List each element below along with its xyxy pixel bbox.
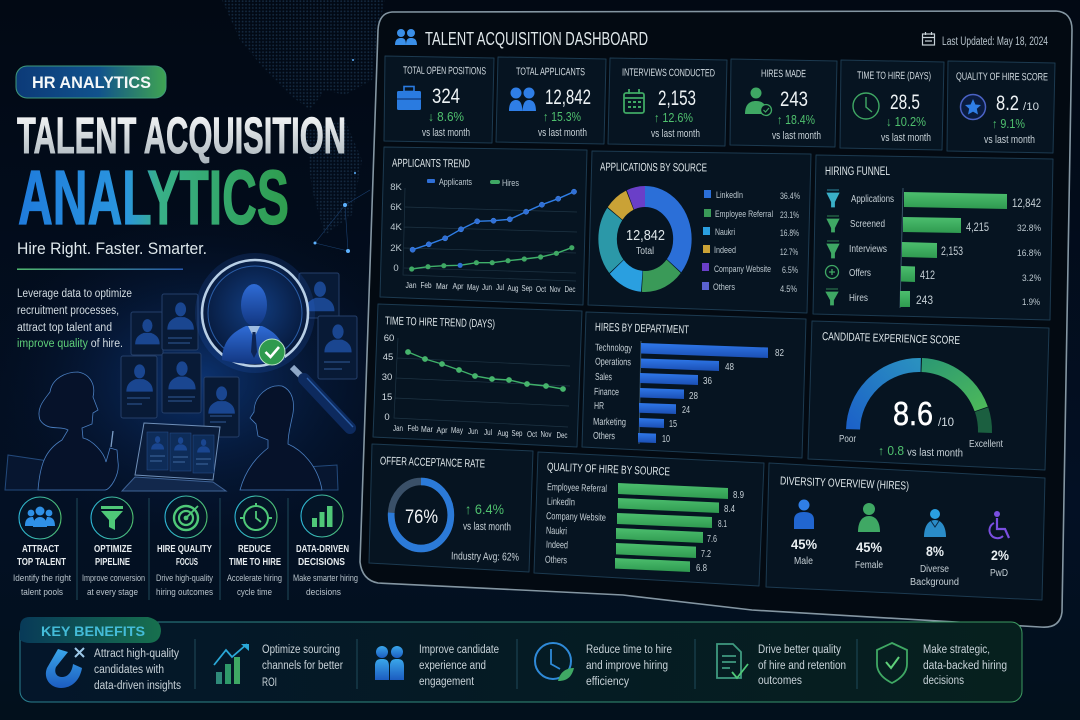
pillar: hire quality focus: FOCUS <box>176 556 198 568</box>
panel: applications by source: 12,842 <box>626 227 665 244</box>
panel: hires by department: HIRES BY DEPARTMENT <box>595 322 689 336</box>
KPI card: total open positions: vs last month <box>422 127 470 139</box>
benefit: time to hire: efficiency <box>586 676 629 688</box>
illustration: recruiter woman <box>5 372 118 490</box>
line: hires <box>409 245 574 272</box>
panel: offer acceptance rate: ↑ 6.4% <box>465 501 504 517</box>
KPI card: hires made: ↑ 18.4% <box>777 113 815 127</box>
panel: hiring funnel <box>813 155 1053 320</box>
x axis labels: Jan <box>406 281 416 290</box>
KPI card: interviews conducted: vs last month <box>651 128 700 140</box>
labels: 15 <box>669 419 677 430</box>
icon: calendar <box>922 32 934 45</box>
bars <box>615 483 728 572</box>
panel: candidate experience score: vs last month <box>907 447 963 459</box>
pillar: hire quality focus: hiring outcomes <box>156 587 213 598</box>
pillar: attract top talent <box>13 497 71 598</box>
bars <box>638 343 768 443</box>
stat: diverse background: 8% <box>926 543 944 559</box>
hero: badge: HR ANALYTICS <box>32 74 151 92</box>
pillar: attract top talent: talent pools <box>21 587 63 598</box>
KPI card: hires made <box>730 59 837 147</box>
x axis labels: Sep <box>512 429 523 438</box>
x axis labels: Dec <box>556 431 568 440</box>
y axis labels <box>382 333 394 423</box>
y axis labels: 8K <box>390 182 402 193</box>
y axis labels: 45 <box>383 352 393 363</box>
labels: Finance <box>594 387 619 398</box>
illustration: laptop <box>122 423 226 491</box>
labels: 28 <box>689 391 698 402</box>
legend: Others <box>713 282 735 293</box>
benefit: time to hire <box>535 643 672 688</box>
stat: pwd: PwD <box>990 568 1008 579</box>
y axis labels: 15 <box>382 392 392 403</box>
panel: time to hire trend: TIME TO HIRE TREND (DAYS) <box>385 315 495 331</box>
labels: Others <box>593 431 615 442</box>
KPI card: interviews conducted: 2,153 <box>658 87 696 110</box>
icon: clock <box>535 643 574 681</box>
legend: 23.1% <box>780 210 799 221</box>
pillar: reduce time to hire <box>227 496 282 598</box>
benefit: time to hire: and improve hiring <box>586 660 668 672</box>
benefit: candidate experience <box>375 644 499 688</box>
icon: star <box>960 94 986 120</box>
benefit: quality of hire: of hire and retention <box>758 660 846 672</box>
hero: description: Leverage data to optimize <box>17 288 132 300</box>
labels <box>593 343 784 445</box>
legend <box>702 190 800 295</box>
pillar: hire quality focus: HIRE QUALITY <box>157 543 212 555</box>
labels: Employee Referral <box>547 482 607 495</box>
labels: 8.1 <box>718 519 727 530</box>
pillar: optimize pipeline: PIPELINE <box>95 556 130 568</box>
KPI card: hires made: vs last month <box>772 130 821 142</box>
KPI card: quality of hire score: vs last month <box>984 134 1035 146</box>
panel: offer acceptance rate: OFFER ACCEPTANCE RATE <box>380 455 485 471</box>
hero: main title: TALENT ACQUISITION <box>17 107 346 164</box>
tab <box>20 617 161 643</box>
ring chart <box>391 482 451 548</box>
panel: applicants trend: APPLICANTS TREND <box>392 158 470 170</box>
benefit: strategic decisions <box>877 643 1007 687</box>
row: hires: 243 <box>916 295 933 307</box>
gauge <box>853 363 987 433</box>
hero: badge <box>16 66 166 98</box>
KPI card: hires made: HIRES MADE <box>761 68 806 80</box>
pillar: hire quality focus: Drive high-quality <box>156 573 213 584</box>
labels: Company Website <box>546 511 606 524</box>
y axis labels: 4K <box>390 222 402 233</box>
benefit: quality of hire: Drive better quality <box>758 644 841 656</box>
row: offers: 3.2% <box>1022 273 1041 284</box>
stat: male: 45% <box>791 536 818 552</box>
labels: Others <box>545 555 567 566</box>
key benefits bar <box>20 617 1022 702</box>
illustration: candidate cards <box>121 273 357 437</box>
y axis labels: 2K <box>390 243 402 254</box>
labels: 36 <box>703 376 712 387</box>
icon: clock <box>853 93 879 119</box>
x axis labels: Dec <box>564 285 576 294</box>
row: screened: 32.8% <box>1017 223 1041 234</box>
pillar: data-driven decisions <box>293 495 358 598</box>
x axis labels: Apr <box>436 426 448 435</box>
KPI card: total applicants <box>496 57 606 144</box>
x axis labels: Sep <box>522 284 533 293</box>
row: offers: Offers <box>849 268 871 279</box>
donut chart <box>608 196 682 282</box>
KPI card: total applicants: 12,842 <box>545 86 591 109</box>
icon: people <box>395 29 417 45</box>
icon: people <box>19 497 61 539</box>
KPI card: total applicants: ↑ 15.3% <box>543 110 581 124</box>
panel: candidate experience score: 8.6 <box>893 395 933 432</box>
KPI card: time to hire: 28.5 <box>890 91 920 114</box>
benefit: strategic decisions: decisions <box>923 675 964 687</box>
benefit: strategic decisions: Make strategic, <box>923 644 990 656</box>
labels: 7.2 <box>701 549 711 560</box>
x axis labels: Jul <box>484 428 492 437</box>
x axis labels: Oct <box>527 430 538 439</box>
KPI card: interviews conducted <box>608 58 727 146</box>
row: interviews: 2,153 <box>941 246 963 258</box>
hero: description: attract top talent and <box>17 322 112 334</box>
x axis labels: Feb <box>408 424 419 433</box>
labels: Sales <box>595 372 612 383</box>
icon: briefcase <box>397 86 421 110</box>
benefit: candidate experience: engagement <box>419 676 475 688</box>
row: interviews <box>827 241 1041 259</box>
x axis labels: Mar <box>421 425 433 434</box>
KPI card: total open positions: TOTAL OPEN POSITIONS <box>403 65 486 77</box>
KPI card: quality of hire score <box>947 61 1055 153</box>
pillar: reduce time to hire: cycle time <box>237 587 272 598</box>
stat: male: Male <box>794 556 813 567</box>
row: screened: Screened <box>850 219 885 230</box>
x axis labels: Aug <box>508 284 518 293</box>
panel: candidate experience score: CANDIDATE EXPERIENCE SCORE <box>822 331 960 347</box>
row: applications: Applications <box>851 194 894 205</box>
panel: quality of hire by source <box>534 452 764 586</box>
icon: people <box>509 88 536 111</box>
pillar: hire quality focus <box>156 496 213 598</box>
pillar: data-driven decisions: Make smarter hiring <box>293 573 358 584</box>
KPI card: quality of hire score: 8.2 <box>996 92 1019 115</box>
icon: person check <box>745 88 772 116</box>
illustration: magnifying glass <box>195 253 353 428</box>
hero: description <box>17 288 132 350</box>
panel: time to hire trend <box>373 304 582 447</box>
KPI card: total open positions <box>384 56 494 143</box>
pillar: attract top talent: Identify the right <box>13 573 71 584</box>
labels <box>545 482 744 574</box>
illustration: recruiter man <box>240 386 338 490</box>
legend: Indeed <box>714 245 736 256</box>
pillar: optimize pipeline <box>82 497 145 598</box>
x axis labels: Aug <box>498 429 508 438</box>
x axis labels: May <box>467 283 479 292</box>
labels: Technology <box>595 343 632 354</box>
x axis labels <box>393 424 568 440</box>
panel: offer acceptance rate: vs last month <box>463 521 511 533</box>
x axis labels: Jun <box>468 427 478 436</box>
KPI card: quality of hire score: /10 <box>1023 101 1039 113</box>
labels: Marketing <box>593 417 626 428</box>
x axis labels: Jan <box>393 424 403 433</box>
benefit: attract: Attract high-quality <box>94 648 179 660</box>
icon: shield <box>877 643 907 683</box>
benefit: candidate experience: experience and <box>419 660 486 672</box>
x axis labels: Jul <box>496 283 504 292</box>
row: offers <box>826 266 1041 284</box>
pillar: data-driven decisions: decisions <box>306 587 341 598</box>
legend: 12.7% <box>780 247 798 258</box>
legend: Company Website <box>714 264 771 275</box>
stat: female: 45% <box>856 539 883 555</box>
y axis labels: 0 <box>384 412 390 423</box>
pillar: optimize pipeline: OPTIMIZE <box>94 543 132 555</box>
pillar: reduce time to hire: REDUCE <box>238 543 271 555</box>
benefit: candidate experience: Improve candidate <box>419 644 499 656</box>
icon: funnel <box>91 497 133 539</box>
row: interviews: 16.8% <box>1017 248 1041 259</box>
x axis labels: Nov <box>540 430 552 439</box>
labels: LinkedIn <box>547 497 575 508</box>
stat: female <box>855 503 883 571</box>
panel: applicants trend <box>380 147 587 305</box>
x axis labels: Oct <box>536 285 547 294</box>
row: interviews: Interviews <box>849 244 887 255</box>
panel: candidate experience score: /10 <box>938 415 954 429</box>
KPI card: time to hire: vs last month <box>881 132 931 144</box>
legend: Employee Referral <box>715 209 773 220</box>
KPI card: total open positions: 324 <box>432 85 460 108</box>
icon: target <box>165 496 207 538</box>
row: hires: 1.9% <box>1022 297 1040 308</box>
benefit: sourcing: Optimize sourcing <box>262 644 340 656</box>
labels: 7.6 <box>707 534 717 545</box>
labels: 82 <box>775 348 784 359</box>
benefit: sourcing <box>214 644 343 689</box>
stat: diverse background: Background <box>910 577 959 588</box>
icon: calendar <box>624 89 644 113</box>
hero: rule <box>17 268 183 270</box>
legend: 16.8% <box>780 228 799 239</box>
pillar: data-driven decisions: DATA-DRIVEN <box>296 543 349 555</box>
stat: pwd <box>989 511 1009 579</box>
row: applications: 12,842 <box>1012 198 1041 210</box>
legend: 36.4% <box>780 191 800 202</box>
panel: offer acceptance rate: Industry Avg: 62% <box>451 550 519 564</box>
row: applications <box>827 190 1041 210</box>
labels: 24 <box>682 405 690 416</box>
hero: description: recruitment processes, <box>17 305 119 317</box>
row: hires: Hires <box>849 293 868 304</box>
y axis labels: 6K <box>390 202 402 213</box>
benefit: attract: data-driven insights <box>94 680 181 692</box>
x axis labels: May <box>451 426 463 435</box>
legend: Hires <box>502 178 519 189</box>
row: hires <box>826 289 1040 308</box>
legend: Applicants <box>439 177 472 188</box>
dashboard header <box>395 29 1048 49</box>
panel: candidate experience score: Excellent <box>969 439 1003 450</box>
pillar: optimize pipeline: Improve conversion <box>82 573 145 584</box>
benefit: time to hire: Reduce time to hire <box>586 644 672 656</box>
benefit: sourcing: ROI <box>262 677 277 689</box>
pillar: attract top talent: ATTRACT <box>22 543 59 555</box>
panel: applications by source <box>588 151 811 313</box>
labels: HR <box>594 401 604 412</box>
legend: 4.5% <box>780 284 797 295</box>
panel: applications by source: Total <box>636 246 654 257</box>
labels: 6.8 <box>696 563 707 574</box>
icon: bars <box>301 495 343 537</box>
labels: Naukri <box>546 526 567 537</box>
icon: magnet <box>46 648 84 688</box>
row: offers: 412 <box>920 270 935 282</box>
icon: growth chart <box>214 644 249 684</box>
KPI card: hires made: 243 <box>780 88 808 111</box>
tab: KEY BENEFITS <box>41 623 145 639</box>
panel: offer acceptance rate <box>369 444 533 572</box>
panel: candidate experience score <box>808 321 1049 470</box>
KPI card: time to hire: ↓ 10.2% <box>886 115 926 129</box>
legend: LinkedIn <box>716 190 743 201</box>
KPI card: quality of hire score: ↑ 9.1% <box>992 117 1025 131</box>
x axis labels <box>406 281 576 294</box>
icon: two people <box>375 646 404 680</box>
legend: Naukri <box>715 227 735 238</box>
pillar: reduce time to hire: TIME TO HIRE <box>229 556 281 568</box>
benefit: quality of hire <box>717 644 846 687</box>
labels: Operations <box>595 357 631 368</box>
benefit: attract <box>46 648 181 692</box>
stat: pwd: 2% <box>991 547 1009 563</box>
panel: quality of hire by source: QUALITY OF HIRE BY SOURCE <box>547 462 670 478</box>
icon: clock <box>235 496 277 538</box>
hero: description: improve quality of hire. <box>17 338 123 350</box>
labels: 8.9 <box>733 490 744 501</box>
icon: document <box>717 644 748 678</box>
benefit: quality of hire: outcomes <box>758 675 802 687</box>
stat: diverse background: Diverse <box>920 564 949 575</box>
labels: Indeed <box>546 540 568 551</box>
panel: candidate experience score: ↑ 0.8 <box>878 444 904 458</box>
line: applicants <box>410 189 577 252</box>
hero: analytics title: ANALYTICS <box>18 155 289 241</box>
x axis labels: Apr <box>452 282 464 291</box>
panel: diversity overview: DIVERSITY OVERVIEW (HIRES) <box>780 475 909 493</box>
stat: male <box>791 500 818 567</box>
x axis labels: Mar <box>436 282 448 291</box>
panel: hires by department <box>582 312 806 458</box>
legend: 6.5% <box>782 265 798 276</box>
stat: female: Female <box>855 560 883 571</box>
KPI card: interviews conducted: ↑ 12.6% <box>654 111 693 125</box>
y axis labels: 30 <box>382 372 392 383</box>
KPI card: total applicants: TOTAL APPLICANTS <box>516 66 585 78</box>
dashboard header: TALENT ACQUISITION DASHBOARD <box>425 29 648 49</box>
panel: diversity overview <box>766 463 1045 600</box>
panel: candidate experience score: Poor <box>839 434 857 445</box>
y axis labels: 0 <box>393 263 399 274</box>
panel: offer acceptance rate: 76% <box>405 507 438 528</box>
benefit: sourcing: channels for better <box>262 660 343 672</box>
x axis labels: Jun <box>482 283 492 292</box>
y axis labels <box>390 182 402 274</box>
legend <box>427 177 519 189</box>
panel: applications by source: APPLICATIONS BY SOURCE <box>600 162 707 174</box>
labels: 10 <box>662 434 670 445</box>
x axis labels: Nov <box>550 285 561 294</box>
hero: tagline: Hire Right. Faster. Smarter. <box>17 239 207 258</box>
KPI card: interviews conducted: INTERVIEWS CONDUCTED <box>622 67 715 79</box>
KPI card: total open positions: ↓ 8.6% <box>428 110 464 124</box>
benefit: attract: candidates with <box>94 664 164 676</box>
labels: 48 <box>725 362 734 373</box>
line: days <box>405 349 566 392</box>
pillar: attract top talent: TOP TALENT <box>17 556 66 568</box>
y axis labels: 60 <box>384 333 394 344</box>
pillar: reduce time to hire: Accelerate hiring <box>227 573 282 584</box>
KPI card: time to hire <box>840 60 944 150</box>
benefit: strategic decisions: data-backed hiring <box>923 660 1007 672</box>
dashboard frame <box>360 11 1072 627</box>
KPI card: time to hire: TIME TO HIRE (DAYS) <box>857 70 931 82</box>
pillar: data-driven decisions: DECISIONS <box>298 556 345 568</box>
row: screened <box>827 216 1041 234</box>
row: screened: 4,215 <box>966 222 989 234</box>
stat: diverse background <box>910 509 959 588</box>
KPI card: total applicants: vs last month <box>538 127 587 139</box>
labels: 8.4 <box>724 504 735 515</box>
pillar: optimize pipeline: at every stage <box>87 587 138 598</box>
panel: hiring funnel: HIRING FUNNEL <box>825 166 890 178</box>
x axis labels: Feb <box>420 281 432 290</box>
